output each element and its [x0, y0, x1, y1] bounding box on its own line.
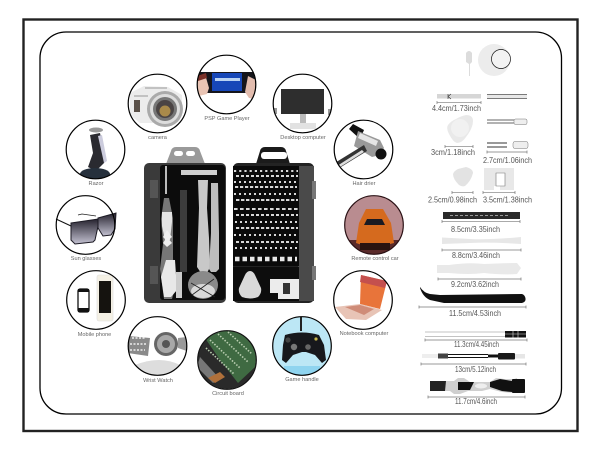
tool: bit holder 4.4cm — [437, 94, 481, 104]
icon: remote control car — [345, 196, 403, 255]
label: 2.5cm: 2.5cm/0.98inch — [428, 196, 477, 204]
label: 2.7cm: 2.7cm/1.06inch — [483, 156, 532, 165]
tool: tweezers — [419, 287, 526, 308]
tool: precision screwdriver — [428, 378, 525, 398]
tool: slim rod with black grip — [425, 331, 527, 342]
sunglasses ring — [56, 196, 115, 254]
label: PSP game player: PSP Game Player — [204, 116, 250, 122]
watch ring — [128, 317, 187, 375]
tool: spudger 8.8cm — [442, 237, 521, 252]
label: 8.5cm: 8.5cm/3.35inch — [451, 225, 500, 234]
tool: flexible shaft — [442, 212, 520, 223]
label: 11.7cm: 11.7cm/4.6inch — [455, 397, 497, 406]
label: notebook computer: Notebook computer — [340, 331, 389, 337]
label: razor: Razor — [89, 181, 104, 187]
mobile ring — [67, 271, 125, 329]
icon: notebook computer — [335, 275, 387, 320]
label: 4.4cm: 4.4cm/1.73inch — [432, 104, 481, 113]
label: mobile phone: Mobile phone — [78, 332, 111, 338]
label: desktop computer: Desktop computer — [280, 135, 326, 141]
tool: suction cup — [478, 44, 510, 76]
label: 13cm: 13cm/5.12inch — [455, 365, 496, 374]
label: camera: camera — [148, 135, 168, 141]
camera ring — [128, 74, 187, 133]
icon: wrist watch — [128, 332, 187, 377]
remote car ring — [345, 196, 403, 254]
notebook ring — [334, 271, 392, 329]
icon: PSP game player — [198, 72, 256, 98]
circuit ring — [198, 331, 256, 389]
hair drier ring — [334, 120, 393, 179]
tool: spudger 9.2cm — [437, 263, 521, 280]
tool: metal rod — [487, 94, 527, 99]
label: 3cm: 3cm/1.18inch — [431, 148, 475, 157]
tool: bit extension block — [483, 168, 515, 194]
label: 11.5cm: 11.5cm/4.53inch — [449, 309, 501, 318]
label: 3.5cm: 3.5cm/1.38inch — [483, 196, 532, 204]
label: wrist watch: Wrist Watch — [143, 378, 173, 384]
tool: extension handle — [421, 353, 526, 366]
label: remote control car: Remote control car — [351, 256, 399, 262]
icon: circuit board — [197, 329, 258, 389]
screwdriver case: right half — [233, 147, 316, 303]
icon: game handle — [273, 316, 331, 378]
inner rounded panel — [40, 32, 562, 414]
tool: triangle pick large — [445, 115, 473, 148]
label: 9.2cm: 9.2cm/3.62inch — [451, 280, 499, 289]
label: 8.8cm: 8.8cm/3.46inch — [452, 251, 500, 260]
desktop ring — [273, 74, 332, 133]
icon: camera — [130, 86, 183, 127]
tool: ejector pin — [466, 51, 472, 76]
icon: hair drier — [333, 124, 386, 167]
label: sun glasses: Sun glasses — [71, 256, 101, 262]
razor ring — [66, 120, 125, 179]
label: hair drier: Hair drier — [352, 181, 376, 187]
label: game handle: Game handle — [285, 377, 319, 383]
screwdriver case: left half — [144, 147, 226, 303]
bit rows — [234, 171, 298, 248]
game handle ring — [273, 317, 331, 375]
icon: razor — [80, 128, 110, 180]
tool: triangle pick small — [452, 167, 473, 194]
icon: desktop computer — [274, 89, 331, 129]
label: circuit board: Circuit board — [212, 391, 244, 397]
icon: mobile phones — [78, 275, 113, 321]
tool: socket bit with 2.7cm span — [487, 142, 528, 154]
icon: sunglasses — [56, 213, 116, 244]
tool: socket bit — [487, 119, 527, 124]
PSP ring — [197, 55, 256, 114]
label: 11.3cm: 11.3cm/4.45inch — [454, 340, 499, 349]
